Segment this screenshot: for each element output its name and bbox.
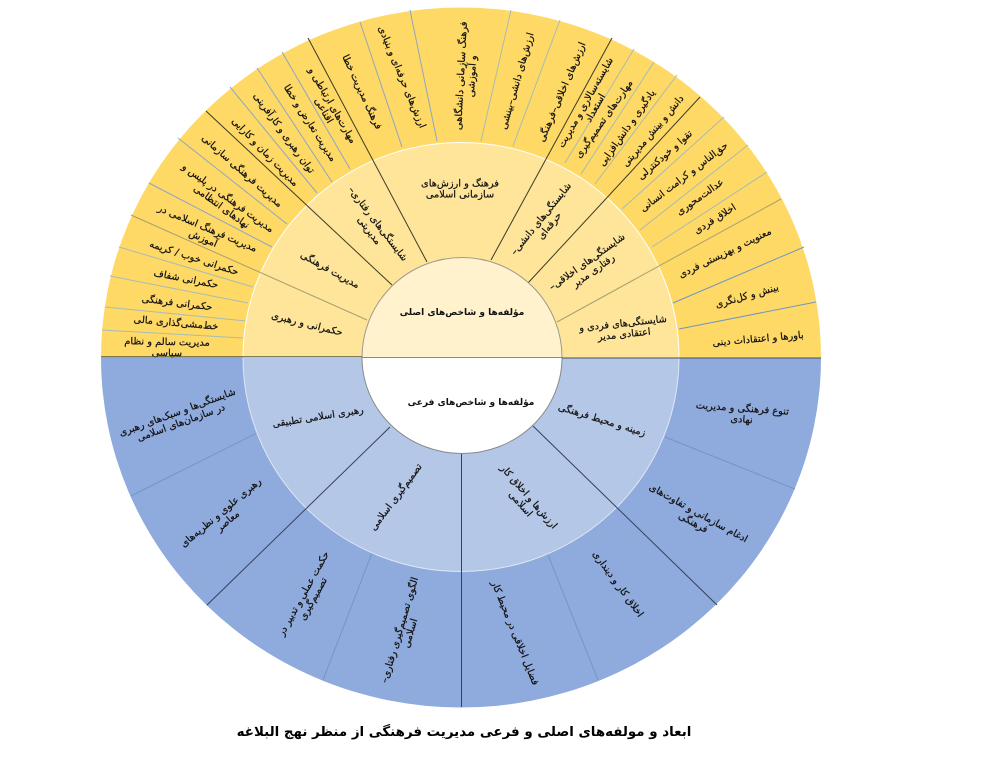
label: Islamic organizational culture: سازمانی اسلامی [426, 190, 494, 200]
label: decision model: الگوی تصمیم‌گیری رفتاری– [378, 576, 421, 684]
center: main components [362, 257, 562, 358]
label: managerial insight: دانش و بینش مدیریتی [620, 93, 686, 169]
label: sound governance: مدیریت سالم و نظام [124, 336, 210, 349]
label: Islamic organizational culture: فرهنگ و ارزش‌های [421, 178, 499, 190]
label: human dignity: حق‌الناس و کرامت انسانی [638, 140, 730, 215]
label: leadership: توان رهبری و کارآفرینی [251, 90, 318, 176]
label: cultural governance: حکمرانی فرهنگی [141, 293, 213, 313]
label: cultural management: مدیریت فرهنگی [298, 249, 362, 291]
label: good governance: حکمرانی خوب / کریمه [148, 239, 240, 278]
label: Alavi leadership: معاصر [214, 509, 242, 535]
label: Islamic organizational culture [421, 178, 499, 200]
label: Islamic culture in education: آموزش [187, 226, 221, 250]
horizon divider [101, 357, 821, 358]
label: practical wisdom: تصمیم‌گیری [297, 575, 330, 622]
label: spirituality: معنویت و بهزیستی فردی [677, 226, 773, 281]
label: academic culture: فرهنگ سازمانی دانشگاهی [452, 21, 470, 130]
label: meritocracy: شایسته‌سالاری و مدیریت [556, 56, 616, 150]
label: individual competencies: شایستگی‌های فردی و [578, 313, 667, 334]
label: cultural context: زمینه و محیط فرهنگی [557, 401, 647, 439]
label: ethical values: ارزش‌های اخلاقی–فرهنگی [536, 40, 588, 144]
label: governance and leadership: حکمرانی و رهبری [270, 310, 344, 339]
label: comparative leadership: رهبری اسلامی تطبیقی [272, 405, 365, 430]
label: holistic insight: بینش و کل‌نگری [714, 281, 780, 311]
category dividers: lower [207, 426, 717, 707]
label: individual competencies: اعتقادی مدیر [596, 327, 651, 343]
label: learning: یادگیری و دانش‌افزایی [596, 87, 658, 168]
label: practical wisdom: حکمت عملی و تدبیر در [276, 550, 332, 639]
label: individual competencies [578, 313, 669, 345]
outer ring: upper [101, 8, 821, 358]
outer labels: lower [117, 386, 790, 688]
label: values and work ethic: ارزش‌ها و اخلاق کار [497, 462, 559, 531]
label: error culture: فرهنگ مدیریت خطا [339, 53, 385, 131]
label: transparent governance: حکمرانی شفاف [153, 268, 219, 291]
label: Islamic culture in education: مدیریت فرهنگ اسلامی در [155, 202, 259, 255]
category dividers: upper [131, 38, 781, 322]
label: Alavi leadership: رهبری علوی و نظریه‌های [179, 476, 264, 550]
label: professional values: ارزش‌های حرفه‌ای و بنیادی [376, 25, 428, 130]
middle labels: lower [272, 401, 647, 538]
panel: sub components (lower half) [101, 358, 821, 708]
label: decision model: اسلامی [401, 617, 420, 649]
panel: main components (upper half) [101, 8, 821, 360]
outer ring dividers: upper [102, 10, 816, 338]
label: cultural diversity [695, 399, 790, 429]
label: time management: مدیریت زمان و کارایی [229, 116, 300, 189]
label: values and work ethic: اسلامی [506, 489, 534, 519]
label: ethical competencies: شایستگی‌های اخلاقی– [547, 231, 627, 293]
label: organizational culture: مدیریت فرهنگی سازمانی [199, 132, 285, 210]
label: behavioral competencies: شایستگی‌های رفتاری– [346, 184, 410, 264]
middle ring: lower [243, 358, 679, 572]
label: decision skills: مهارت‌های تصمیم‌گیری [572, 78, 636, 160]
middle labels: upper [270, 178, 669, 345]
label: professional competencies: شایستگی‌های دانشی– [508, 180, 574, 258]
label: main components: مؤلفه‌ها و شاخص‌های اصلی [400, 308, 524, 318]
title: ابعاد و مولفه‌های اصلی و فرعی مدیریت فرهنگی از منظر نهج البلاغه [237, 723, 691, 740]
label: financial policy: خط‌مشی‌گذاری مالی [133, 313, 219, 333]
middle ring: upper [243, 142, 679, 358]
label: sound governance [124, 336, 210, 360]
label: justice: عدالت‌محوری [675, 177, 726, 218]
label: police institutions: مدیریت فرهنگی در پلیس و [179, 160, 276, 235]
outer ring: lower [101, 358, 821, 708]
label: police institutions: نهادهای انتظامی [191, 183, 251, 231]
label: cultural diversity: تنوع فرهنگی و مدیریت [695, 399, 790, 418]
label: religious beliefs: باورها و اعتقادات دینی [712, 330, 804, 349]
label: cultural integration: ادغام سازمانی و تفاوت‌های [647, 482, 749, 545]
label: conflict management: مدیریت تعارض و خطا [281, 83, 338, 164]
label: sub components: مؤلفه‌ها و شاخص‌های فرعی [408, 398, 534, 408]
label: meritocracy: استعداد [583, 92, 608, 124]
label: personal ethics: اخلاق فردی [692, 202, 738, 237]
label: knowledge values: ارزش‌های دانشی–بینشی [498, 31, 537, 131]
label: piety: تقوا و خودکنترلی [636, 128, 695, 182]
label: professional competencies: حرفه‌ای [536, 210, 564, 242]
label: Islamic decision making: تصمیم‌گیری اسلامی [367, 461, 425, 533]
label: academic culture [452, 21, 481, 131]
label: ethical competencies: رفتاری مدیر [570, 252, 617, 291]
label: communication skills: مهارت‌های ارتباطی و [305, 65, 358, 146]
label: cultural integration: فرهنگی [676, 510, 710, 536]
label: academic culture: و آموزشی [464, 55, 479, 98]
label: communication skills: اقناعی [312, 96, 335, 125]
outer labels: upper [124, 21, 804, 360]
label: sound governance: سیاسی [152, 348, 182, 359]
label: behavioral competencies: مدیریتی [355, 215, 383, 247]
label: leadership styles: شایستگی‌ها و سبک‌های رهبری [117, 386, 237, 439]
label: work ethic: اخلاق کار و دینداری [590, 549, 645, 619]
label: leadership styles: در سازمان‌های اسلامی [136, 402, 227, 444]
outer ring dividers: lower [131, 433, 795, 680]
center: sub components [362, 358, 562, 454]
label: cultural diversity: نهادی [730, 414, 753, 426]
label: workplace virtues: فضایل اخلاقی در محیط کار [488, 578, 541, 687]
